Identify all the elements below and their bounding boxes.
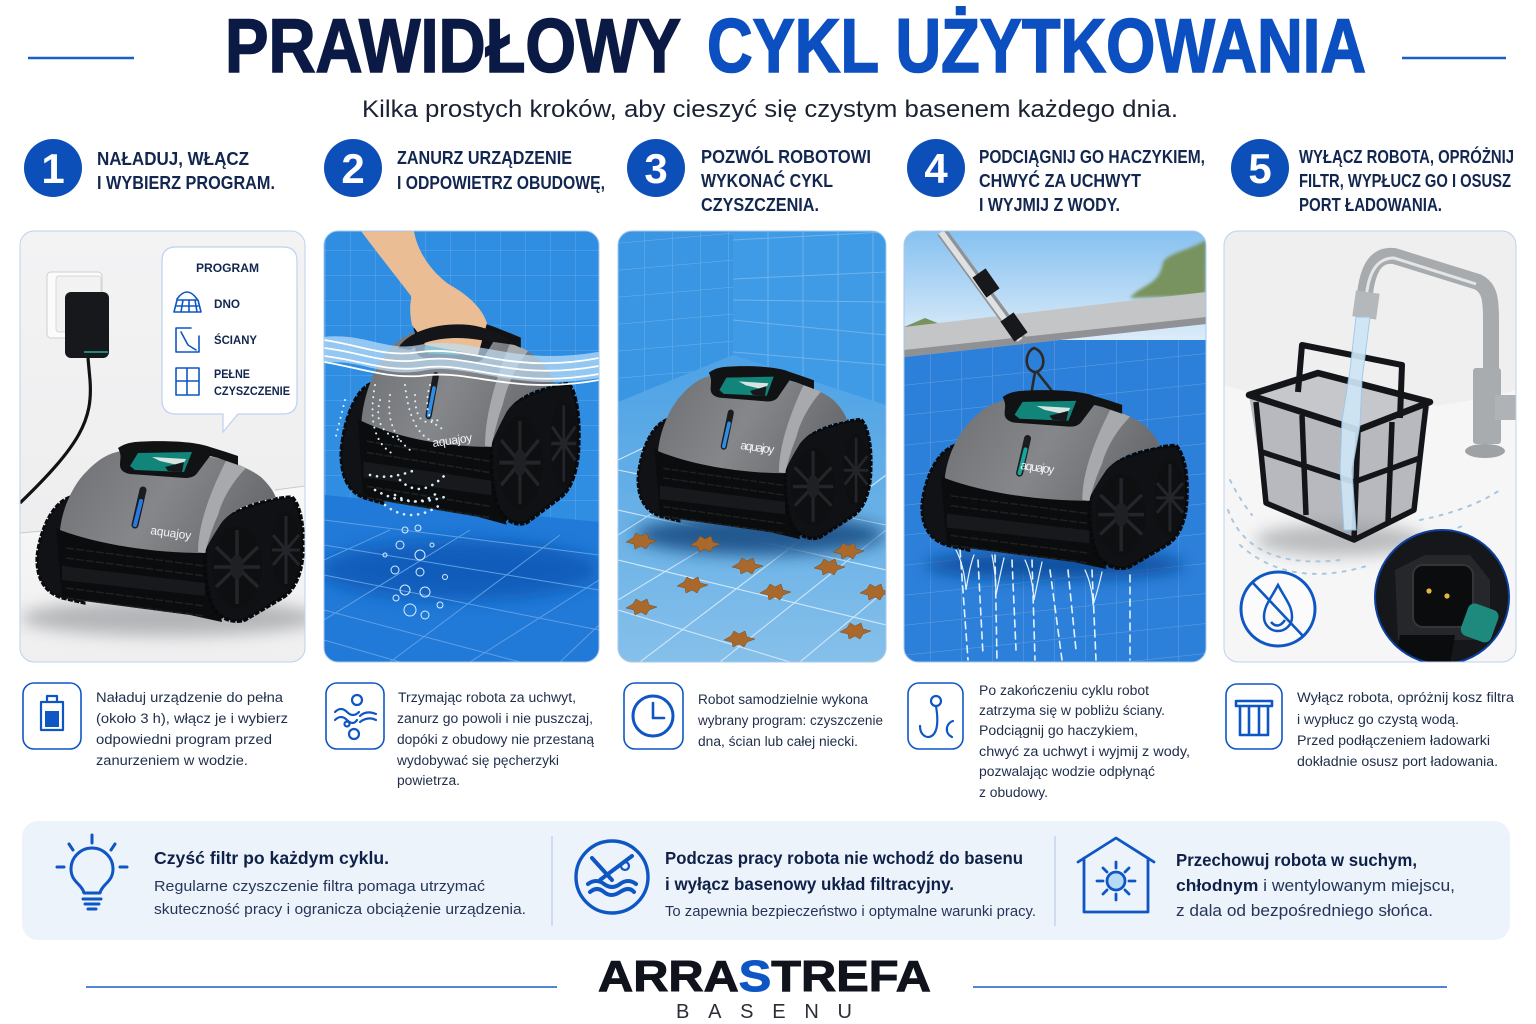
step 2 header: 2 bbox=[341, 145, 365, 192]
logo bbox=[598, 952, 931, 1023]
panel border 4 bbox=[904, 231, 1206, 662]
step 4 header: 4 bbox=[924, 145, 948, 192]
panel: step 1 photo bbox=[20, 231, 320, 662]
icon: battery bbox=[23, 683, 81, 749]
program bubble: ŚCIANY bbox=[214, 332, 257, 347]
logo: ARRA STREFA bbox=[598, 952, 931, 1001]
step 1 description: odpowiedni program przed bbox=[96, 732, 272, 747]
brand label: aquajoy bbox=[150, 523, 192, 543]
panel border 2 bbox=[324, 231, 599, 662]
step 5 description: i wypłucz go czystą wodą. bbox=[1297, 712, 1459, 727]
step 4 description bbox=[908, 683, 1190, 800]
icon: light bulb bbox=[57, 835, 127, 909]
footer rule left bbox=[86, 986, 557, 988]
faucet bbox=[1352, 256, 1518, 458]
title: CYKL UŻYTKOWANIA bbox=[707, 4, 1366, 89]
water splashes bbox=[1228, 480, 1500, 574]
panel border 3 bbox=[618, 231, 886, 662]
step 3 header bbox=[627, 139, 871, 215]
water surface bbox=[324, 340, 599, 385]
step 2 header: I ODPOWIETRZ OBUDOWĘ, bbox=[397, 173, 605, 193]
step 2 header bbox=[324, 139, 605, 197]
step 1 description bbox=[23, 683, 288, 768]
left title rule bbox=[28, 57, 134, 59]
tip 1 text bbox=[154, 848, 526, 918]
filter basket bbox=[1249, 345, 1430, 540]
tip 2 text: Podczas pracy robota nie wchodź do basenu bbox=[665, 848, 1023, 868]
step 3 description: wybrany program: czyszczenie bbox=[697, 713, 883, 728]
panel: step 4 photo bbox=[904, 231, 1206, 662]
step 5 description bbox=[1226, 684, 1515, 769]
icon: walls bbox=[176, 328, 199, 352]
step 1 description: zanurzeniem w wodzie. bbox=[96, 753, 248, 768]
panel: step 3 photo bbox=[618, 231, 891, 662]
step 1 description: (około 3 h), włącz je i wybierz bbox=[96, 711, 288, 726]
step 4 description: pozwalając wodzie odpłynąć bbox=[979, 764, 1155, 779]
tip 2 text bbox=[665, 848, 1036, 920]
step 4 description: z obudowy. bbox=[979, 785, 1048, 800]
leaves bbox=[626, 533, 891, 647]
footer rule right bbox=[973, 986, 1447, 988]
step 2 description: Trzymając robota za uchwyt, bbox=[398, 690, 576, 705]
step 3 header: WYKONAĆ CYKL bbox=[701, 170, 833, 191]
step 4 description: Podciągnij go haczykiem, bbox=[979, 723, 1138, 738]
step 3 description: Robot samodzielnie wykona bbox=[698, 692, 868, 707]
water stream bbox=[1340, 317, 1370, 530]
step 5 description: Wyłącz robota, opróżnij kosz filtra bbox=[1297, 690, 1515, 705]
icon: clock bbox=[624, 683, 683, 749]
program bubble: CZYSZCZENIE bbox=[214, 384, 290, 398]
tip 1 text: Czyść filtr po każdym cyklu. bbox=[154, 848, 389, 868]
air bubbles bbox=[335, 385, 450, 619]
icon: bubbles and waves bbox=[326, 683, 384, 749]
step 4 header bbox=[907, 139, 1205, 215]
title: PRAWIDŁOWY bbox=[225, 4, 681, 89]
step 3 description bbox=[624, 683, 883, 749]
step 4 description: zatrzyma się w pobliżu ściany. bbox=[979, 703, 1165, 718]
step 4 header: CHWYĆ ZA UCHWYT bbox=[979, 170, 1141, 191]
icon: hook bbox=[908, 683, 963, 749]
program bubble: PROGRAM bbox=[196, 261, 259, 275]
step 4 description: chwyć za uchwyt i wyjmij z wody, bbox=[979, 744, 1190, 759]
tip 3 text: z dala od bezpośredniego słońca. bbox=[1176, 901, 1433, 920]
tip 2 text: i wyłącz basenowy układ filtracyjny. bbox=[665, 874, 954, 894]
step 5 description: dokładnie osusz port ładowania. bbox=[1297, 754, 1498, 769]
step 1 header: 1 bbox=[41, 145, 65, 192]
program bubble: PEŁNE bbox=[214, 367, 250, 381]
icon: no water bbox=[1241, 572, 1315, 646]
step 2 header: ZANURZ URZĄDZENIE bbox=[397, 148, 572, 168]
step 3 header: CZYSZCZENIA. bbox=[701, 195, 819, 215]
program bubble: DNO bbox=[214, 297, 240, 311]
subtitle: Kilka prostych kroków, aby cieszyć się czystym basenem każdego dnia. bbox=[362, 96, 1178, 123]
tip 3 text: Przechowuj robota w suchym, bbox=[1176, 850, 1417, 870]
tip 2 text: To zapewnia bezpieczeństwo i optymalne warunki pracy. bbox=[665, 903, 1036, 920]
step 2 description: dopóki z obudowy nie przestaną bbox=[397, 732, 594, 747]
icon: no swimming bbox=[576, 841, 648, 913]
handle bbox=[398, 324, 515, 350]
tip 3 text: chłodnym i wentylowanym miejscu, bbox=[1176, 876, 1455, 895]
step 1 header: I WYBIERZ PROGRAM. bbox=[97, 173, 275, 193]
step 1 header bbox=[24, 139, 275, 197]
step 5 header: PORT ŁADOWANIA. bbox=[1299, 195, 1442, 215]
panel: step 5 photo bbox=[1224, 231, 1518, 665]
tip 3 text bbox=[1176, 850, 1455, 920]
icon: house with sun bbox=[1078, 838, 1154, 912]
step 2 description bbox=[326, 683, 594, 788]
pole bbox=[938, 232, 1054, 390]
tip 1 text: skuteczność pracy i ogranicza obciążenie urządzenia. bbox=[154, 901, 526, 918]
panel: step 2 photo bbox=[320, 231, 600, 662]
logo: BASENU bbox=[676, 1001, 852, 1023]
hand bbox=[361, 231, 487, 355]
step 5 description: Przed podłączeniem ładowarki bbox=[1297, 733, 1490, 748]
step 2 description: wydobywać się pęcherzyki bbox=[396, 753, 559, 768]
step 3 description: dna, ścian lub całej niecki. bbox=[698, 734, 858, 749]
port inset bbox=[1375, 530, 1509, 665]
step 5 header bbox=[1231, 139, 1514, 215]
step 4 description: Po zakończeniu cyklu robot bbox=[979, 683, 1149, 698]
program bubble bbox=[162, 247, 297, 432]
step 3 header: POZWÓL ROBOTOWI bbox=[701, 146, 871, 167]
water drips bbox=[956, 550, 1130, 660]
tip 1 text: Regularne czyszczenie filtra pomaga utrzymać bbox=[154, 878, 486, 895]
step 1 header: NAŁADUJ, WŁĄCZ bbox=[97, 149, 249, 169]
title bbox=[225, 4, 1366, 89]
panel border 1 bbox=[20, 231, 305, 662]
step 2 description: powietrza. bbox=[397, 773, 460, 788]
brand label: aquajoy bbox=[740, 438, 775, 457]
brand label: aquajoy bbox=[1020, 458, 1055, 477]
step 3 header: 3 bbox=[644, 145, 668, 192]
step 2 description: zanurz go powoli i nie puszczaj, bbox=[397, 711, 593, 726]
step 4 header: I WYJMIJ Z WODY. bbox=[979, 195, 1120, 215]
panel border 5 bbox=[1224, 231, 1516, 662]
step 1 description: Naładuj urządzenie do pełna bbox=[96, 690, 284, 705]
step 4 header: PODCIĄGNIJ GO HACZYKIEM, bbox=[979, 147, 1205, 167]
right title rule bbox=[1402, 57, 1506, 59]
icon: floor bbox=[174, 292, 201, 312]
step 5 header: 5 bbox=[1248, 145, 1272, 192]
brand label: aquajoy bbox=[431, 431, 473, 450]
icon: full cleaning bbox=[176, 368, 199, 395]
tips band bbox=[22, 821, 1510, 940]
icon: filter bbox=[1226, 684, 1282, 749]
